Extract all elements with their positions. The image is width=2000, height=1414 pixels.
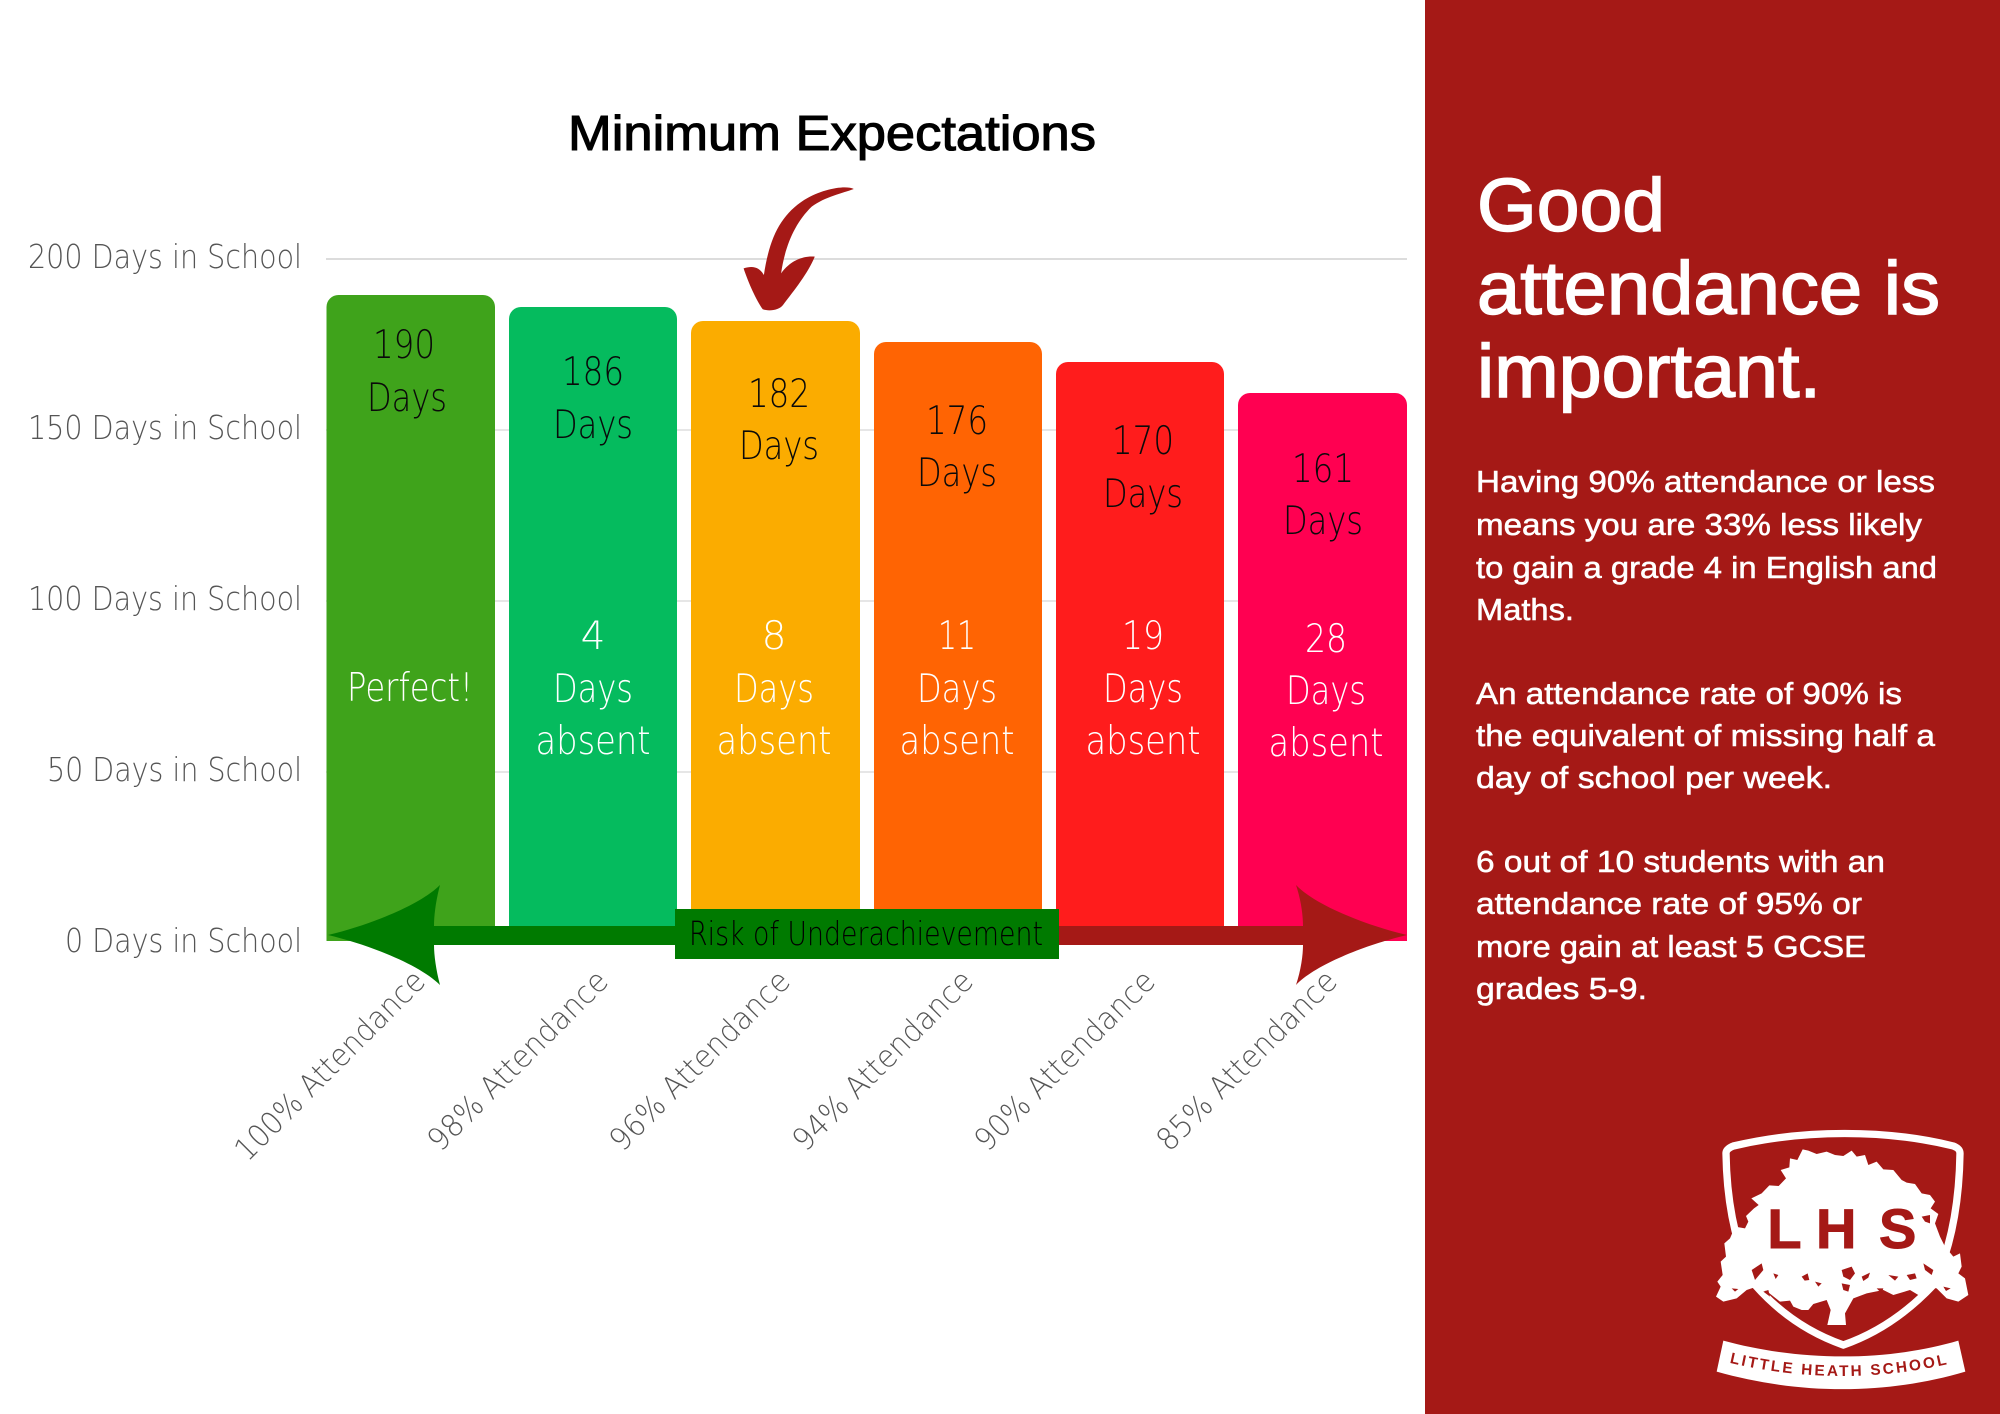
heading [1477, 163, 1940, 413]
logo letters: LHS [1767, 1197, 1916, 1260]
x-axis labels: 96% Attendance [602, 963, 798, 1158]
logo: Little Heath School crest [1716, 1130, 1968, 1390]
bar: 96% attendance [691, 321, 860, 941]
bar: 98% attendance: 4 [581, 614, 605, 659]
y-axis labels: 0 Days in School [65, 921, 302, 960]
logo letters: LHS: H [1816, 1197, 1856, 1260]
bar: 96% attendance: Days [734, 667, 814, 712]
text block: GCSE grades: 6 out of 10 students with an [1476, 844, 1885, 879]
panel: good attendance [1425, 0, 2000, 1414]
bar: 90% attendance: absent [1086, 719, 1200, 764]
x-axis labels: 94% Attendance [785, 963, 981, 1158]
bar: 85% attendance [1238, 393, 1407, 941]
text block: GCSE grades [1476, 844, 1885, 1006]
text block: half a day: An attendance rate of 90% is [1476, 676, 1902, 711]
y-axis labels: 150 Days in School [28, 408, 302, 447]
bar: 98% attendance: Days [553, 403, 633, 448]
text block: GCSE grades: grades 5-9. [1476, 971, 1647, 1006]
bar: 85% attendance: 28 [1305, 617, 1347, 662]
logo banner: LITTLE HEATH SCHOOL [1730, 1352, 1947, 1376]
x-axis labels: 90% Attendance [967, 963, 1163, 1158]
title: Minimum Expectations: Minimum Expectations [568, 107, 1096, 161]
bar: 98% attendance: Days [553, 667, 633, 712]
bar: 96% attendance: 8 [762, 614, 786, 659]
bar: 96% attendance: absent [716, 719, 832, 764]
x-axis labels: 85% Attendance [1149, 963, 1345, 1158]
bar: 96% attendance: 182 [748, 372, 810, 417]
bar: 94% attendance [874, 342, 1042, 941]
text block: GCSE grades: more gain at least 5 GCSE [1476, 929, 1866, 964]
text block: half a day: day of school per week. [1476, 760, 1832, 795]
heading: important. [1477, 329, 1821, 413]
x-axis labels [228, 963, 1345, 1168]
heading: Good [1477, 163, 1665, 247]
x-axis labels: 100% Attendance [228, 963, 433, 1168]
bar: 100% attendance: Days [367, 376, 447, 421]
bar: 90% attendance: Days [1103, 667, 1183, 712]
y-axis labels: 100 Days in School [28, 579, 302, 618]
text block: 90 percent likelihood: means you are 33% less likely [1476, 507, 1923, 542]
logo letters: LHS: L [1767, 1197, 1802, 1260]
bar chart [326, 295, 1407, 941]
bar: 90% attendance: Days [1103, 472, 1183, 517]
bar: 96% attendance: Days [739, 424, 819, 469]
bar: 100% attendance [326, 295, 495, 941]
text block: half a day: the equivalent of missing half a [1476, 718, 1936, 753]
label: risk of underachievement [675, 909, 1059, 959]
arrow: left green [328, 885, 700, 985]
text block: 90 percent likelihood [1476, 464, 1937, 627]
bar: 90% attendance: 170 [1112, 419, 1174, 464]
y-axis labels: 50 Days in School [47, 750, 302, 789]
bar: 94% attendance: Days [917, 667, 997, 712]
text block: 90 percent likelihood: Maths. [1476, 592, 1574, 627]
bar: 100% attendance: 190 [373, 323, 435, 368]
bar: 90% attendance: 19 [1122, 614, 1164, 659]
logo letters: LHS: S [1879, 1197, 1916, 1260]
bar: 94% attendance: 11 [938, 614, 976, 659]
bar: 94% attendance: absent [900, 719, 1014, 764]
bar: 85% attendance: absent [1268, 721, 1384, 766]
bar: 98% attendance [509, 307, 677, 941]
bar: 100% attendance: Perfect! [347, 666, 473, 711]
text block: half a day [1476, 676, 1936, 795]
y-axis labels: 200 Days in School [28, 237, 302, 276]
bar: 98% attendance: 186 [562, 350, 624, 395]
x-axis labels: 98% Attendance [420, 963, 616, 1158]
bar: 94% attendance: Days [917, 451, 997, 496]
bar: 85% attendance: Days [1286, 669, 1366, 714]
bar: 90% attendance [1056, 362, 1224, 941]
bar: 85% attendance: Days [1283, 499, 1363, 544]
arrow: right red [1050, 885, 1407, 985]
text block: GCSE grades: attendance rate of 95% or [1476, 886, 1862, 921]
bar: 94% attendance: 176 [926, 399, 988, 444]
heading: attendance is [1477, 246, 1940, 330]
arrow: minimum expectations pointer [744, 187, 854, 310]
logo banner [1716, 1340, 1966, 1390]
y-axis labels [28, 237, 302, 960]
text block: 90 percent likelihood: to gain a grade 4 in English and [1476, 550, 1937, 585]
bar: 98% attendance: absent [536, 719, 650, 764]
label: risk of underachievement: Risk of Underachievement [689, 914, 1043, 953]
text block: 90 percent likelihood: Having 90% attendance or less [1476, 464, 1935, 499]
bar: 85% attendance: 161 [1292, 447, 1354, 492]
